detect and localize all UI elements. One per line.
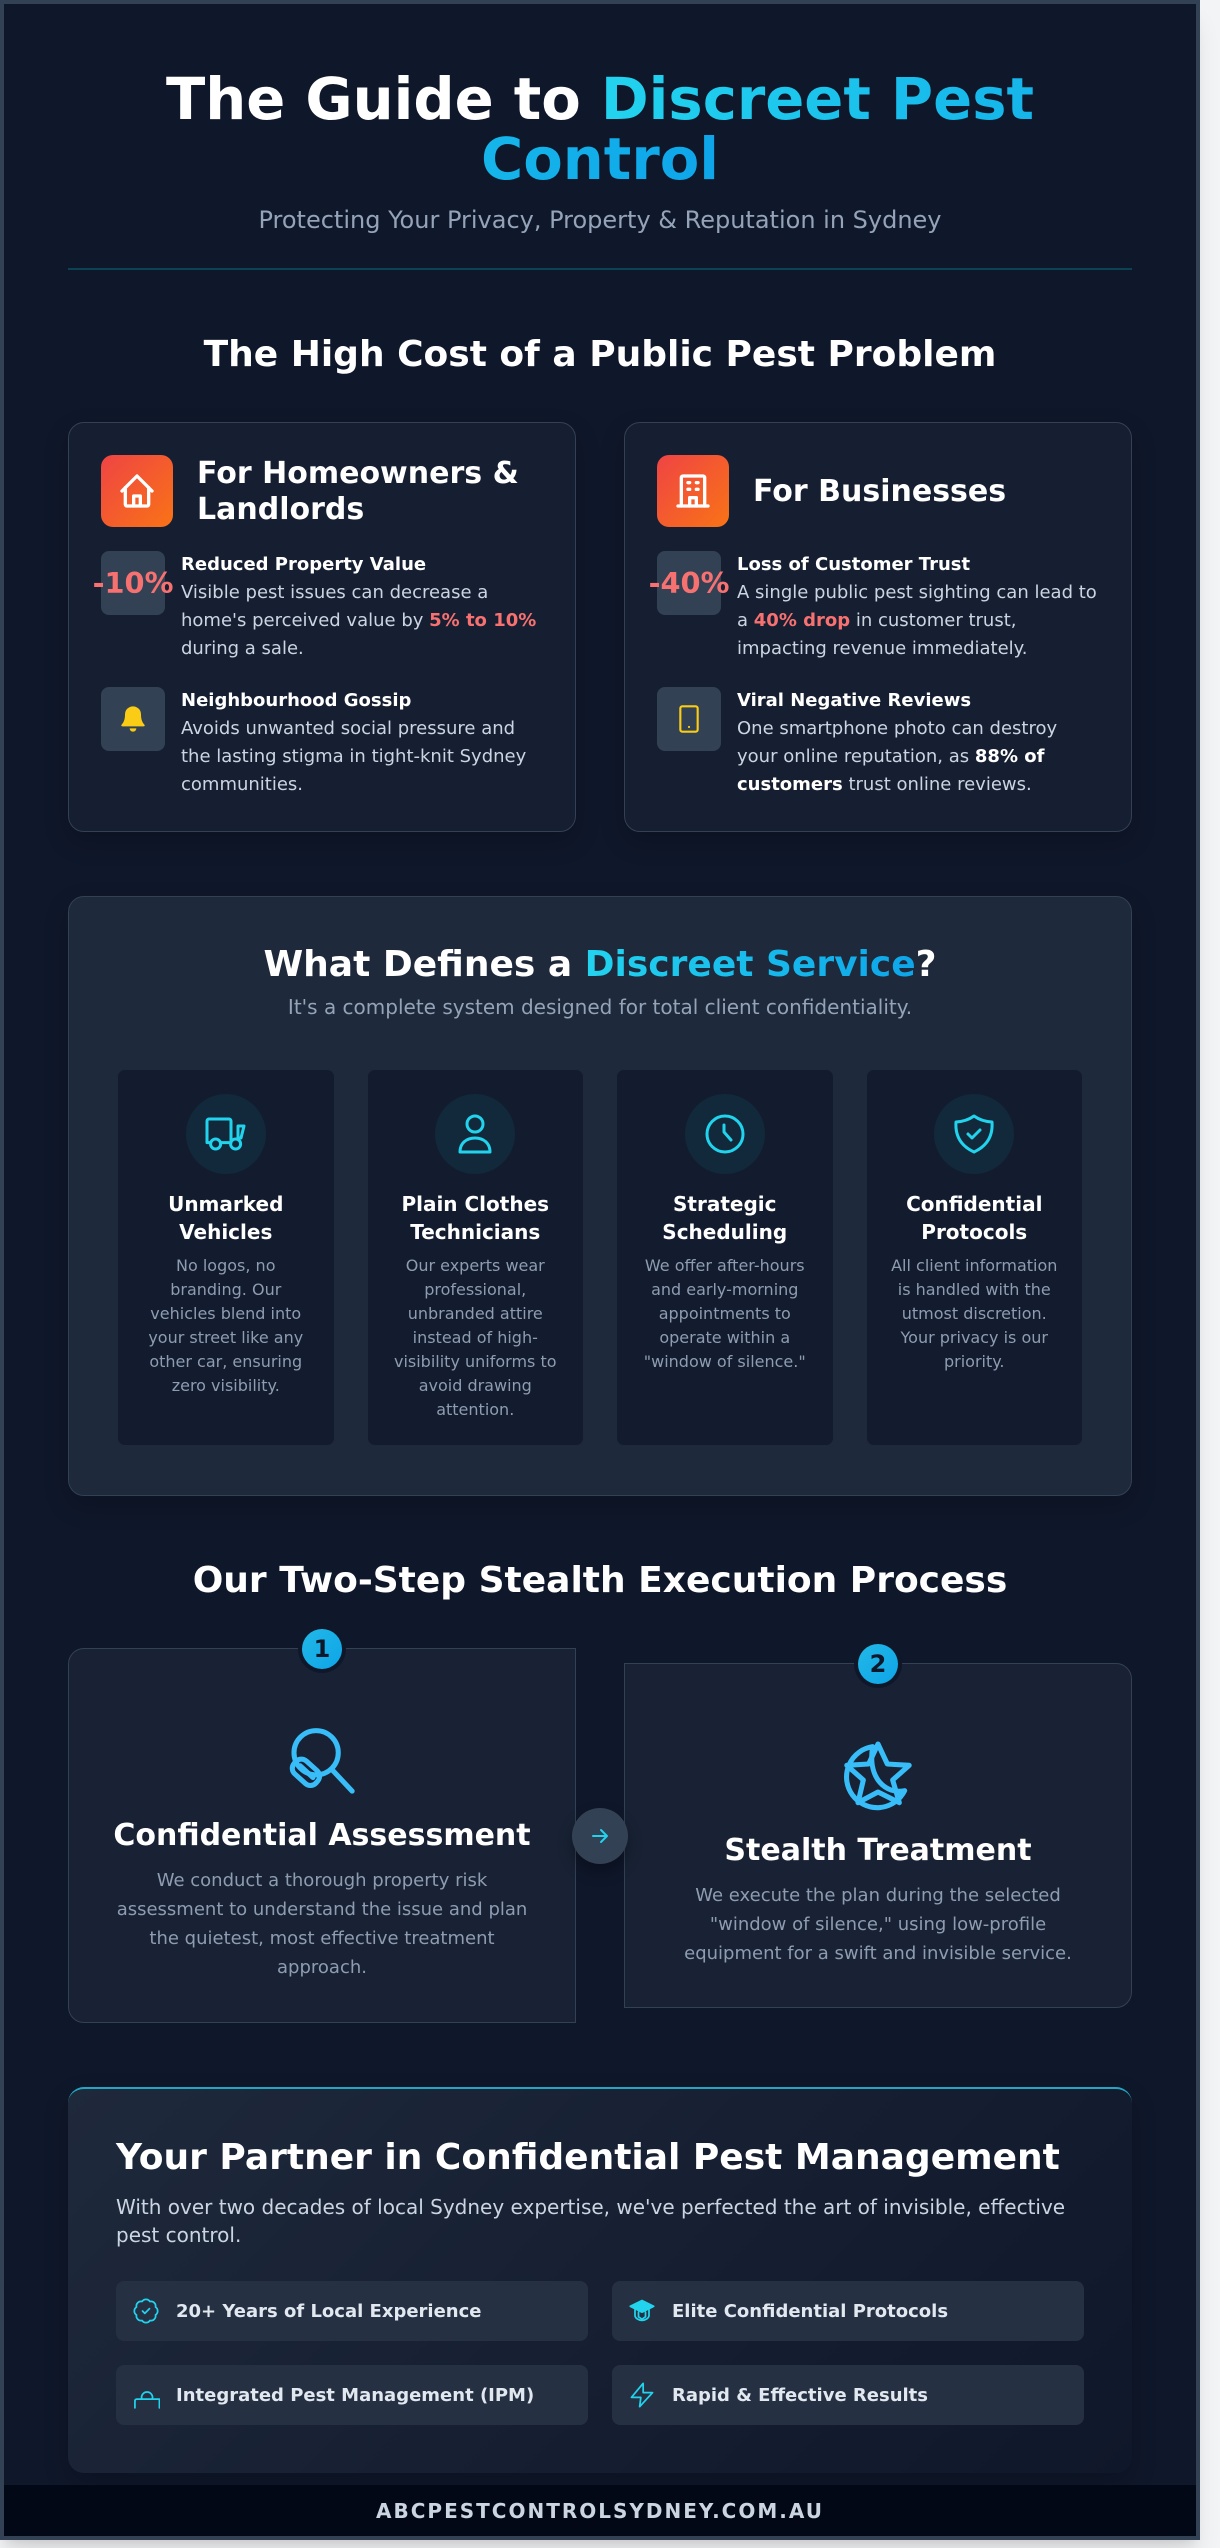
item: elite protocols: Elite Confidential Protocols (672, 2300, 948, 2322)
stat: -10% (101, 551, 165, 615)
panel: businesses (624, 422, 1132, 832)
feature: unmarked vehicles (117, 1069, 334, 1446)
step 1: confidential assessment: We conduct a thorough property risk assessment to understand the issue and plan the quietest, most effective treatment approach. (117, 1870, 527, 1978)
icon: vehicle (186, 1094, 266, 1174)
footer: ABCPESTCONTROLSYDNEY.COM.AU (376, 2499, 824, 2523)
footer (4, 2485, 1196, 2536)
heading: two-step process: Our Two-Step Stealth Execution Process (193, 1560, 1007, 1601)
icon: person (435, 1094, 515, 1174)
panel: what defines a discreet service (68, 896, 1132, 1496)
text: viral negative reviews: Viral Negative Reviews (737, 690, 971, 711)
text: viral negative reviews: One smartphone photo can destroy your online reputation, as 88% of customers trust online reviews. (737, 718, 1057, 795)
text: partner description: With over two decades of local Sydney expertise, we've perfected the art of invisible, effective pest control. (116, 2195, 1065, 2247)
feature: strategic scheduling: We offer after-hours and early-morning appointments to operate within a "window of silence." (644, 1256, 806, 1371)
panel: your partner (68, 2087, 1132, 2473)
item: rapid results: Rapid & Effective Results (672, 2384, 928, 2406)
item: integrated pest management (116, 2365, 588, 2425)
step 2: stealth treatment: Stealth Treatment (724, 1832, 1032, 1868)
icon: moon and star (844, 1742, 912, 1810)
text: neighbourhood gossip: Neighbourhood Gossip (181, 690, 411, 711)
feature: strategic scheduling: Strategic Scheduling (662, 1192, 787, 1244)
icon: building (657, 455, 729, 527)
step 2: stealth treatment: We execute the plan during the selected "window of silence," using low-profile equipment for a swift and invisible service. (684, 1884, 1072, 1964)
stat: -40% (657, 551, 721, 615)
text: reduced property value: Visible pest issues can decrease a home's perceived value by 5% to 10% during a sale. (181, 582, 536, 659)
heading: your partner: Your Partner in Confidential Pest Management (116, 2137, 1060, 2178)
panel: homeowners and landlords (68, 422, 576, 832)
feature: plain clothes technicians (366, 1069, 584, 1446)
badge: step 1 (302, 1629, 342, 1669)
heading: what defines a discreet service: What Defines a Discreet Service? (263, 944, 937, 985)
feature: unmarked vehicles: Unmarked Vehicles (168, 1192, 283, 1244)
feature: confidential protocols: All client information is handled with the utmost discretion. Your privacy is our priority. (891, 1256, 1057, 1371)
text: neighbourhood gossip: Avoids unwanted social pressure and the lasting stigma in tight-knit Sydney communities. (181, 718, 526, 795)
badge: step 2: 2 (870, 1650, 886, 1678)
card heading: For Businesses (753, 474, 1006, 509)
arrow between steps (572, 1808, 628, 1864)
icon: search (290, 1728, 355, 1794)
text: loss of customer trust: Loss of Customer Trust (737, 554, 970, 575)
feature: strategic scheduling (616, 1069, 834, 1446)
feature: unmarked vehicles: No logos, no branding. Our vehicles blend into your street like any other car, ensuring zero visibility. (148, 1256, 303, 1395)
feature: plain clothes technicians: Our experts wear professional, unbranded attire instead of high-visibility uniforms to avoid drawing attention. (394, 1256, 557, 1419)
card heading: For Homeowners & Landlords (197, 456, 519, 527)
icon: shield (934, 1094, 1014, 1174)
step 1: confidential assessment (68, 1648, 576, 2023)
item: elite protocols (612, 2281, 1084, 2341)
feature: confidential protocols: Confidential Protocols (906, 1192, 1042, 1244)
title: The Guide to Discreet Pest Control (166, 66, 1034, 193)
icon: bell (101, 687, 165, 751)
feature: confidential protocols (866, 1069, 1083, 1446)
item: years of experience: 20+ Years of Local Experience (176, 2300, 482, 2322)
icon: clock (685, 1094, 765, 1174)
subtitle: Protecting Your Privacy, Property & Reputation in Sydney (258, 206, 942, 234)
icon: phone (657, 687, 721, 751)
subheading: It's a complete system designed for total client confidentiality. (288, 995, 912, 1019)
item: rapid results (612, 2365, 1084, 2425)
text: reduced property value: Reduced Property Value (181, 554, 426, 575)
text: loss of customer trust: A single public pest sighting can lead to a 40% drop in customer trust, impacting revenue immediately. (737, 582, 1097, 659)
badge: step 1: 1 (314, 1635, 330, 1663)
step 1: confidential assessment: Confidential Assessment (113, 1818, 531, 1852)
item: integrated pest management: Integrated Pest Management (IPM) (176, 2384, 534, 2406)
stat: -10%: -10% (93, 566, 173, 600)
item: years of experience (116, 2281, 588, 2341)
feature: plain clothes technicians: Plain Clothes Technicians (401, 1192, 549, 1244)
badge: step 2 (858, 1644, 898, 1684)
stat: -40%: -40% (649, 566, 729, 600)
step 2: stealth treatment (624, 1663, 1132, 2008)
heading: the high cost: The High Cost of a Public Pest Problem (204, 334, 996, 375)
icon: house (101, 455, 173, 527)
